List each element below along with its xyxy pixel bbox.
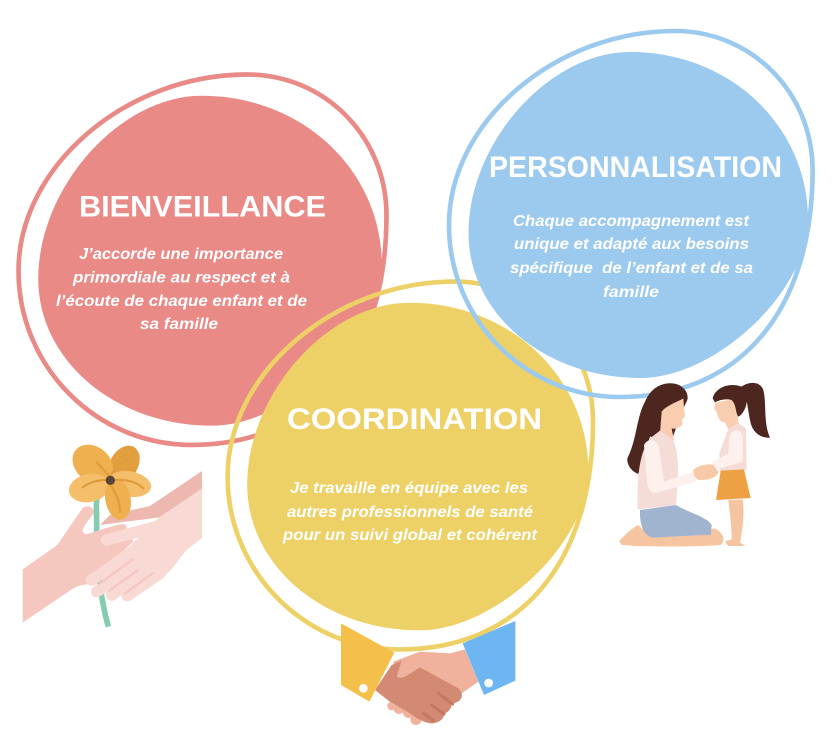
text block: bienveillance: J’accorde une importance: [79, 246, 283, 263]
heading: personnalisation: PERSONNALISATION: [489, 151, 782, 184]
icon: mother and daughter: [619, 383, 770, 547]
icon: hands holding a flower: [23, 437, 202, 627]
heading: bienveillance: BIENVEILLANCE: [79, 190, 326, 224]
text block: personnalisation: [510, 213, 753, 301]
text block: bienveillance: l’écoute de chaque enfant et de: [56, 293, 307, 310]
text block: coordination: [282, 480, 538, 544]
text block: personnalisation: famille: [603, 284, 659, 301]
text block: coordination: Je travaille en équipe avec les: [290, 480, 528, 497]
text block: bienveillance: [56, 246, 307, 333]
text block: coordination: autres professionnels de santé: [287, 504, 533, 521]
text block: bienveillance: primordiale au respect et à: [72, 270, 290, 286]
text block: bienveillance: sa famille: [140, 316, 218, 333]
icon: handshake: [341, 621, 515, 725]
text block: coordination: pour un suivi global et cohérent: [282, 527, 538, 544]
text block: personnalisation: unique et adapté aux besoins: [514, 236, 749, 253]
text block: personnalisation: Chaque accompagnement est: [513, 213, 750, 230]
panel: personnalisation: [449, 31, 813, 397]
heading: coordination: COORDINATION: [287, 403, 542, 436]
panel: coordination: [228, 282, 593, 649]
text block: personnalisation: spécifique de l’enfant et de sa: [510, 260, 753, 277]
panel: bienveillance: [19, 75, 386, 445]
